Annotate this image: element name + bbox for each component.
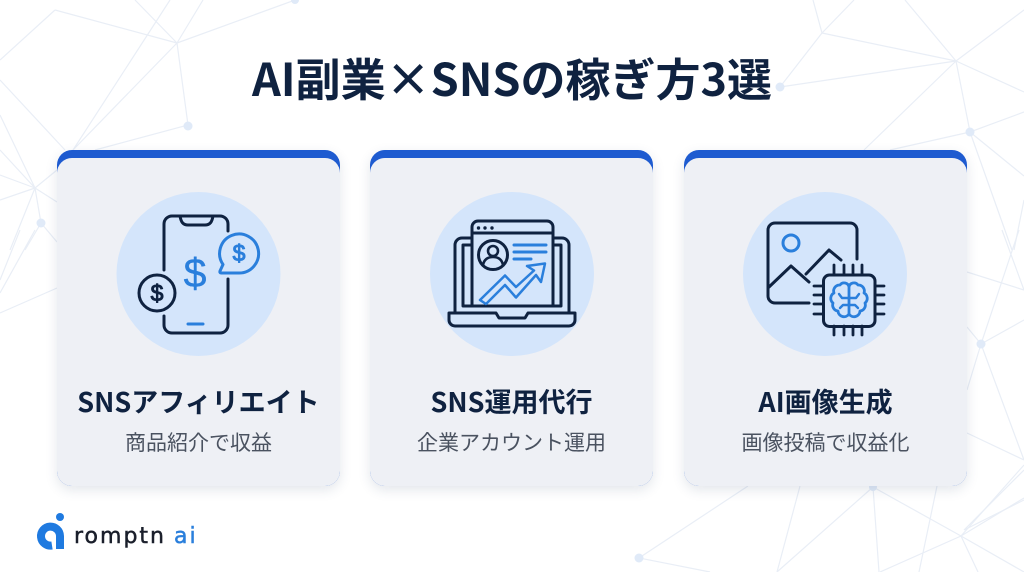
description: 画像投稿で収益化 xyxy=(742,427,910,457)
icon: phone with dollar signs: $ xyxy=(151,280,164,306)
panel: AI image generation xyxy=(684,150,967,486)
icon: image with AI brain chip xyxy=(743,192,907,356)
heading: AI画像生成 xyxy=(758,381,893,420)
icon: phone with dollar signs xyxy=(116,192,280,356)
description: 商品紹介で収益 xyxy=(125,427,272,457)
icon: phone with dollar signs: $ xyxy=(184,250,207,296)
panel: SNS management xyxy=(370,150,653,486)
icon: phone with dollar signs: $ xyxy=(233,240,246,266)
logo wordmark: romptn ai xyxy=(74,524,198,549)
logo xyxy=(37,513,198,550)
title: AI副業×SNSの稼ぎ方3選 xyxy=(252,44,772,109)
icon: logo mark xyxy=(37,513,64,550)
icon: laptop with profile and growth chart xyxy=(430,192,594,356)
description: 企業アカウント運用 xyxy=(417,427,606,457)
heading: SNS運用代行 xyxy=(431,381,592,420)
panel: SNS affiliate xyxy=(57,150,340,486)
heading: SNSアフィリエイト xyxy=(77,381,320,420)
